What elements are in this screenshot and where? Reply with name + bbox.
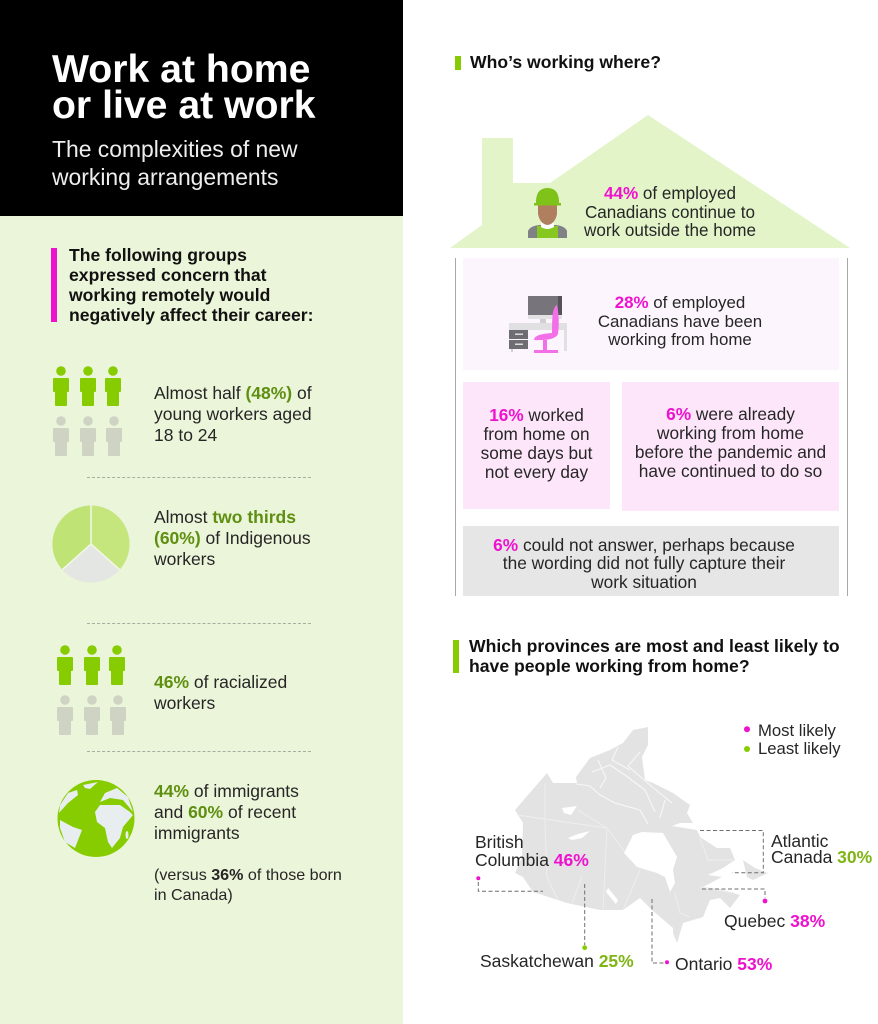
- text: 16 percent some days: from home on: [483, 424, 590, 444]
- text: 6 percent could not answer: the wording did not fully capture their: [503, 553, 785, 573]
- text: 6 percent already from home: working from home: [657, 422, 804, 442]
- heading: concerned groups: The following groups: [69, 245, 247, 265]
- house wall right: [846, 258, 848, 596]
- text: 6 percent already from home: [635, 404, 826, 480]
- chart: pie two thirds: [52, 506, 130, 582]
- label: British Columbia: Columbia 46%: [475, 850, 589, 870]
- text: 6 percent already from home: have continued to do so: [639, 460, 822, 480]
- text: 16 percent some days: some days but: [481, 442, 592, 462]
- text: 28 percent from home: [598, 293, 762, 349]
- subtitle: The complexities of new: [52, 136, 298, 162]
- text: 28 percent from home: Canadians have been: [598, 312, 762, 331]
- text: 16 percent some days: 16% worked: [489, 404, 584, 424]
- title: or live at work: [52, 84, 316, 127]
- heading: provinces: have people working from home?: [469, 656, 750, 676]
- title: [52, 48, 316, 127]
- text: 16 percent some days: not every day: [485, 462, 588, 482]
- Hudson Bay and lakes: [562, 806, 677, 904]
- legend: [758, 721, 841, 758]
- label: Quebec: Quebec 38%: [724, 911, 825, 931]
- text: 28 percent from home: 28% of employed: [615, 293, 745, 312]
- legend: Most likely: [758, 721, 836, 740]
- text: 44 percent outside the home: 44% of employed: [604, 184, 736, 203]
- text: immigrants: and 60% of recent: [154, 802, 296, 822]
- text: 6 percent already from home: 6% were already: [666, 404, 795, 424]
- text: Indigenous workers: Almost two thirds: [154, 506, 296, 526]
- panel: 6 percent already from home: [622, 382, 839, 511]
- icon: people 48 percent: [53, 366, 122, 456]
- text: Indigenous workers: [154, 506, 311, 568]
- text: young workers: young workers aged: [154, 404, 312, 424]
- label: Atlantic Canada: Atlantic: [771, 831, 828, 851]
- text: born in Canada: (versus 36% of those born: [154, 866, 342, 884]
- heading: who's working where: Who’s working where?: [470, 52, 661, 72]
- arctic channels and province borders: [576, 747, 672, 824]
- text: Indigenous workers: (60%) of Indigenous: [154, 528, 311, 548]
- text: immigrants: [154, 780, 299, 842]
- text: 6 percent could not answer: 6% could not answer, perhaps because: [493, 534, 795, 554]
- text: 16 percent some days: [481, 404, 592, 482]
- text: 6 percent could not answer: work situation: [591, 572, 697, 592]
- legend: Least likely: [758, 738, 841, 758]
- text: racialized workers: workers: [154, 692, 215, 712]
- house wall left: [454, 258, 456, 596]
- text: immigrants: 44% of immigrants: [154, 780, 299, 800]
- text: 44 percent outside the home: [584, 184, 756, 240]
- label: British Columbia: [475, 832, 589, 870]
- accent bar: magenta: [51, 248, 57, 322]
- label: Saskatchewan: Saskatchewan 25%: [480, 951, 634, 971]
- text: young workers: Almost half (48%) of: [154, 382, 312, 402]
- subtitle: working arrangements: [52, 164, 278, 190]
- heading: concerned groups: working remotely would: [69, 285, 270, 305]
- heading: concerned groups: expressed concern that: [69, 265, 267, 285]
- text: immigrants: immigrants: [154, 822, 240, 842]
- icon: desk and chair: [509, 296, 567, 353]
- accent bar: who's working where: [455, 56, 461, 70]
- heading: concerned groups: [69, 245, 313, 325]
- title: Work at home: [52, 48, 310, 91]
- label: Atlantic Canada: [771, 831, 872, 866]
- label: Atlantic Canada: Canada 30%: [771, 846, 872, 866]
- text: racialized workers: [154, 672, 287, 712]
- house roof: [450, 115, 850, 248]
- heading: concerned groups: negatively affect their career:: [69, 305, 313, 325]
- panel: 16 percent some days: [463, 382, 610, 509]
- text: 44 percent outside the home: Canadians continue to: [585, 203, 755, 222]
- subtitle: [52, 136, 298, 190]
- text: born in Canada: [154, 866, 342, 904]
- panel: 28 percent from home: [463, 258, 839, 370]
- text: born in Canada: in Canada): [154, 886, 233, 904]
- label: British Columbia: British: [475, 832, 524, 852]
- panel: title block: [0, 0, 403, 216]
- callout lines: [478, 830, 765, 963]
- heading: provinces: [469, 636, 840, 676]
- panel: career concern groups: [0, 216, 403, 1024]
- text: racialized workers: 46% of racialized: [154, 672, 287, 692]
- text: 6 percent could not answer: [493, 534, 795, 592]
- accent bar: provinces: [453, 640, 459, 673]
- icon: worker: [528, 188, 567, 238]
- text: 44 percent outside the home: work outside the home: [584, 221, 756, 240]
- text: 28 percent from home: working from home: [608, 330, 752, 349]
- text: 6 percent already from home: before the pandemic and: [635, 442, 826, 462]
- icon: people 46 percent: [57, 645, 126, 735]
- text: young workers: [154, 382, 312, 444]
- icon: globe: [58, 780, 134, 857]
- text: young workers: 18 to 24: [154, 424, 217, 444]
- heading: provinces: Which provinces are most and least likely to: [469, 636, 840, 656]
- label: Ontario: Ontario 53%: [675, 954, 772, 974]
- text: Indigenous workers: workers: [154, 548, 215, 568]
- panel: 6 percent could not answer: [463, 526, 839, 596]
